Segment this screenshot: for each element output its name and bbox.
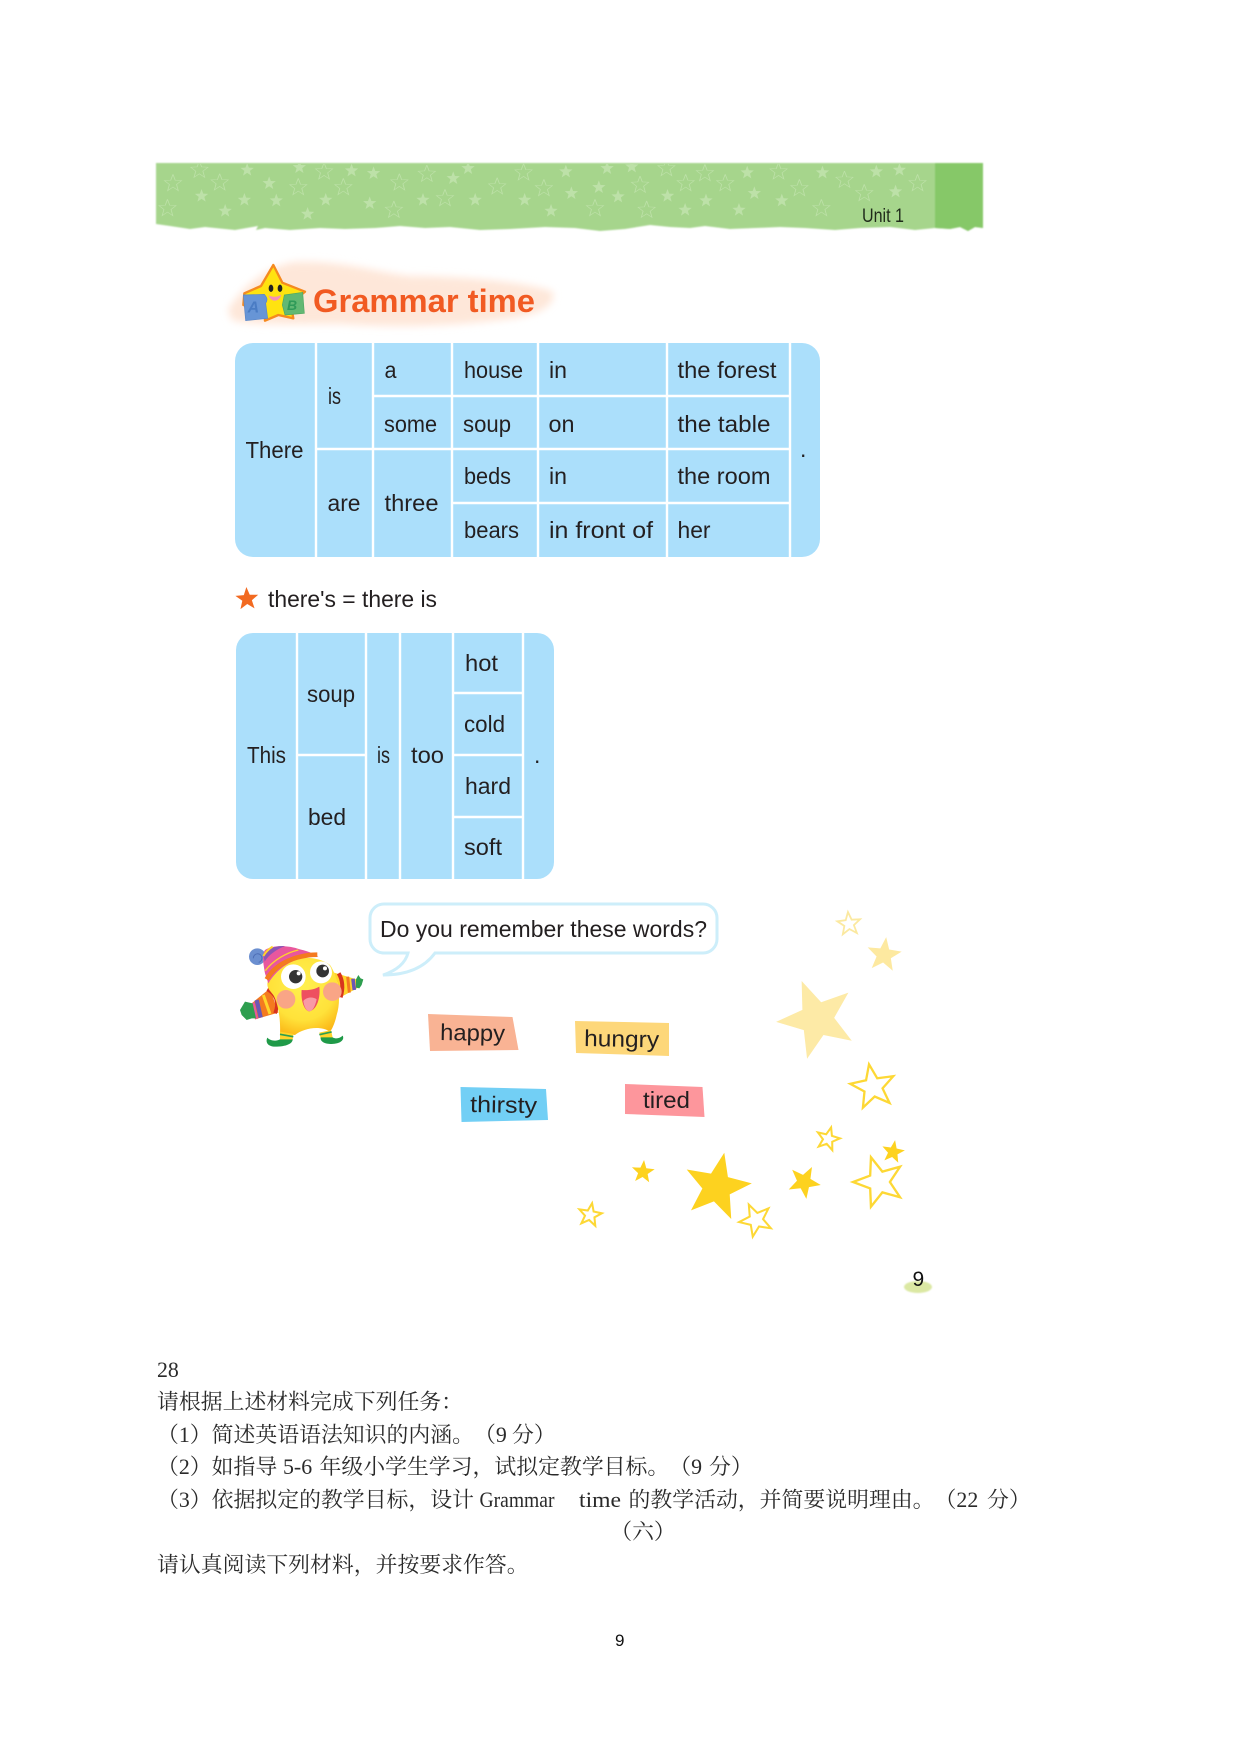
word card: hungry: hungry [584,1025,660,1052]
word card: thirsty [460,1087,548,1122]
column: adjectives: cold [464,711,505,737]
column: subject noun: soup [307,681,355,707]
banner label: Unit 1: Unit 1 [862,206,904,227]
column: noun [463,357,523,543]
question text block [157,1358,1031,1578]
banner: green torn-edge header [156,159,983,231]
question text block: 请认真阅读下列材料，并按要求作答。 [157,1553,529,1578]
question text block: 请根据上述材料完成下列任务： [157,1390,463,1414]
table: There is / There are substitution grid [235,343,820,557]
word card: hungry [575,1021,669,1056]
word card: happy: happy [440,1019,506,1046]
column: verb: are [328,490,360,516]
column: verb [328,383,360,516]
stars: pale group [765,911,903,1064]
column: noun: house [464,357,523,383]
character: yellow monster with striped hat [240,946,363,1047]
question text block: Grammar [480,1488,555,1512]
icon: orange star [235,586,259,609]
question text block: 28 [157,1358,179,1382]
question text block: （1）简述英语语法知识的内涵。（9 [157,1423,507,1447]
column: preposition: in front of [549,517,654,543]
column: subject noun [307,681,355,830]
column: noun: bears [464,517,519,543]
column: preposition: on [548,411,574,437]
column: too: too [411,742,444,768]
document page number: 9 [615,1631,624,1650]
icon: star mascot holding A and B blocks: B [287,297,297,313]
question text block: 的教学活动，并简要说明理由。（22 [628,1488,978,1512]
column: place: the room [678,463,770,489]
note: there's = there is: there's = there is [268,586,437,612]
heading: Grammar time with star mascot [228,262,553,326]
column: quantifier: some [384,411,437,437]
question text block: 分） [709,1455,753,1479]
question text block: （六） [610,1520,676,1544]
question text block: 5-6 [283,1455,312,1479]
question text block: 年级小学生学习，试拟定教学目标。（9 [320,1455,702,1480]
column: noun: beds [464,463,511,489]
column: full stop: . [800,436,806,462]
stars: bright yellow group [577,1061,909,1239]
column: quantifier [384,357,438,516]
table: This soup/bed is too ... grid [236,633,554,879]
word card: happy [428,1014,518,1051]
word card: thirsty: thirsty [470,1091,538,1118]
column: subject noun: bed [308,804,346,830]
question text block: 分） [512,1423,556,1447]
column: preposition [548,357,654,543]
column: preposition: in [549,357,567,383]
column: place: the table [678,411,770,437]
textbook page number: 9 [912,1268,924,1291]
column: adjectives: hard [465,773,511,799]
column: is: is [377,742,390,768]
speech bubble: Do you remember these words? [380,916,707,942]
column: full stop: . [534,742,540,768]
column: place: the forest [678,357,777,383]
question text block: （3）依据拟定的教学目标，设计 [157,1488,474,1513]
column: noun: soup [463,411,511,437]
column: There: There [246,437,304,463]
icon: star mascot holding A and B blocks [243,265,305,321]
question text block: time [579,1488,621,1512]
column: This: This [247,742,286,768]
icon: star mascot holding A and B blocks: A [247,300,259,317]
column: quantifier: a [384,357,397,383]
word card: tired [625,1084,704,1117]
speech bubble [370,904,717,975]
column: verb: is [328,383,341,409]
column: quantifier: three [384,490,438,516]
question text block: （2）如指导 [157,1455,277,1479]
column: place: her [678,517,711,543]
question text block: 分） [987,1488,1031,1512]
textbook page number [904,1268,932,1293]
heading: Grammar time with star mascot: Grammar time [313,283,535,319]
word card: tired: tired [643,1087,690,1113]
column: adjectives: soft [464,834,503,860]
column: adjectives: hot [465,650,499,676]
column: preposition: in [549,463,567,489]
column: place [678,357,777,543]
column: adjectives [464,650,511,860]
